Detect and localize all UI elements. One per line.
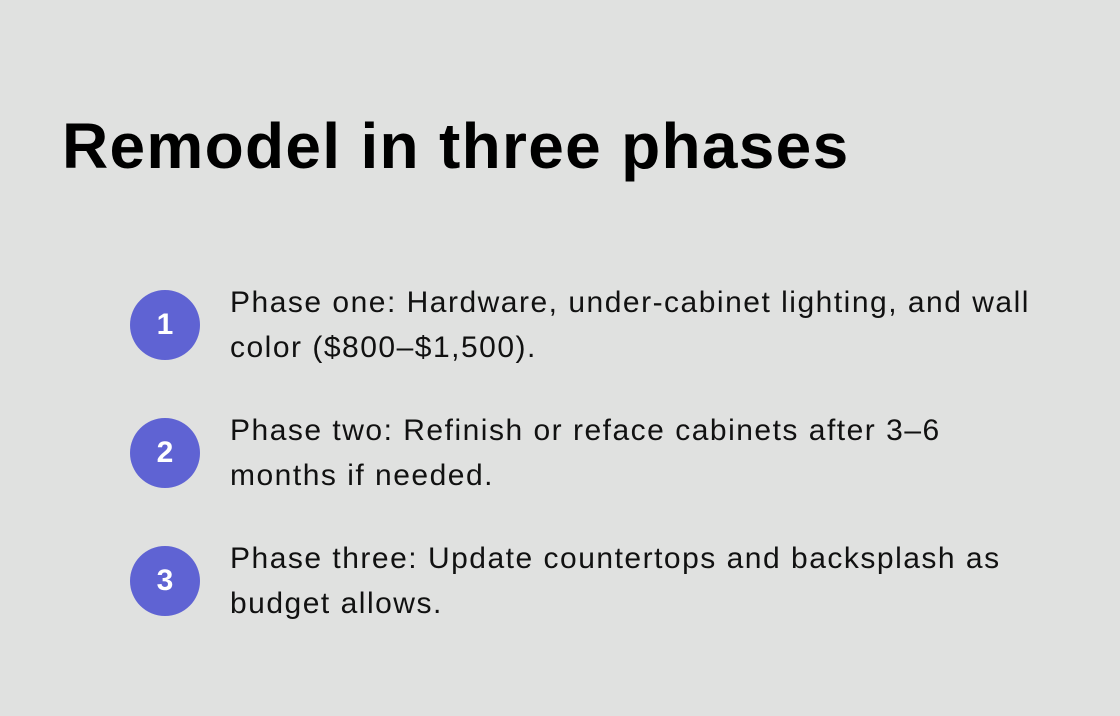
title: Remodel in three phases bbox=[62, 110, 849, 182]
text 1: Phase one: Hardware, under-cabinet lighting, and wall bbox=[230, 286, 1030, 319]
circle 3 bbox=[130, 546, 200, 616]
step 3 bbox=[130, 542, 1001, 620]
circle 1: 1 bbox=[157, 308, 173, 341]
circle 1 bbox=[130, 290, 200, 360]
text 2 bbox=[230, 414, 941, 492]
text 1: color ($800–$1,500). bbox=[230, 331, 537, 364]
text 1 bbox=[230, 286, 1030, 364]
text 2: months if needed. bbox=[230, 459, 494, 492]
circle 2 bbox=[130, 418, 200, 488]
text 3 bbox=[230, 542, 1001, 620]
step 2 bbox=[130, 414, 941, 492]
text 2: Phase two: Refinish or reface cabinets after 3–6 bbox=[230, 414, 941, 447]
step 1 bbox=[130, 286, 1030, 364]
circle 3: 3 bbox=[157, 564, 173, 597]
circle 2: 2 bbox=[157, 436, 173, 469]
text 3: budget allows. bbox=[230, 587, 443, 620]
text 3: Phase three: Update countertops and backsplash as bbox=[230, 542, 1001, 575]
